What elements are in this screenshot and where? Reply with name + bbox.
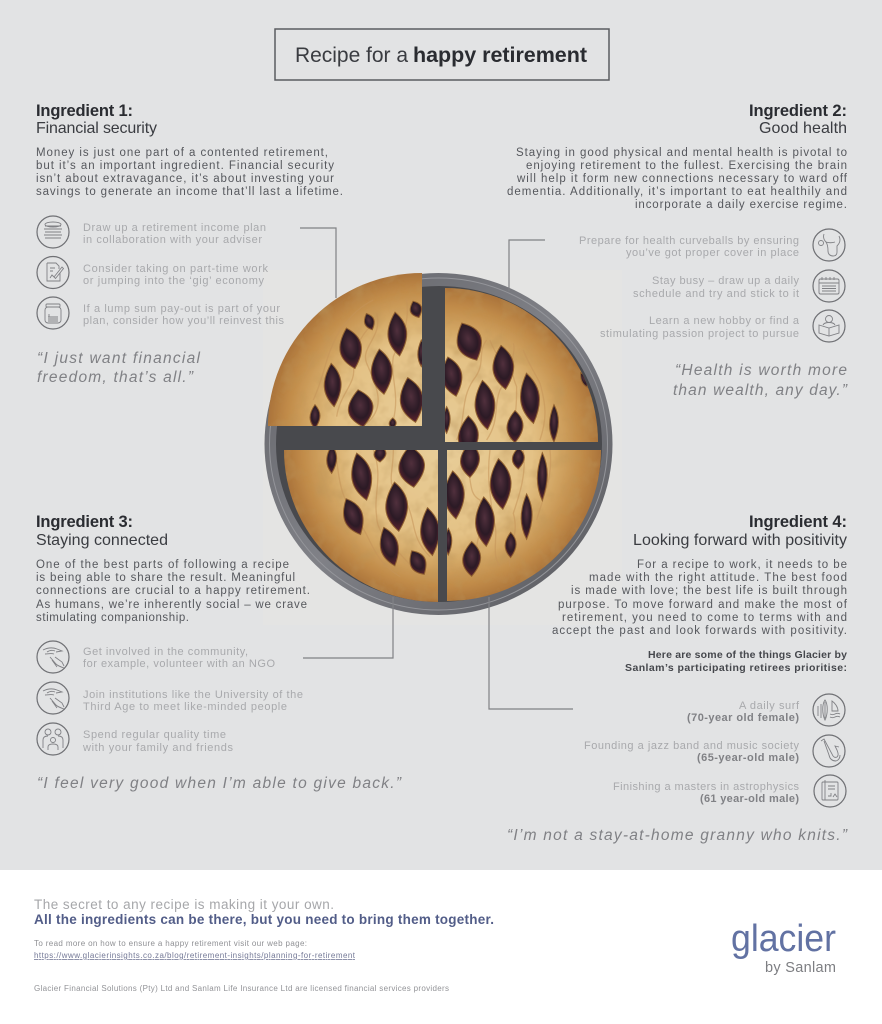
title box: happy retirement [413,43,587,67]
tip text: jazz band: Founding a jazz band and music society [584,740,800,752]
body text: ingredient 2: dementia. Additionally, it’s important to eat healthily and [507,186,847,198]
footer background [0,870,882,1024]
logo: glacier by Sanlam: by Sanlam [765,960,836,976]
read more link: To read more on how to ensure a happy retirement visit our web page: [34,939,307,948]
heading: ingredient 4: Ingredient 4: [749,513,847,531]
body text: ingredient 4 [552,559,848,637]
tip text: astrophysics [613,781,800,805]
tip text: daily schedule: schedule and try and stick to it [633,288,799,300]
body text: ingredient 3: As humans, we’re inherently social – we crave [36,599,307,611]
body text: ingredient 1: but it’s an important ingredient. Financial security [36,160,334,172]
tip text: part-time work: or jumping into the ‘gig’ economy [83,275,264,287]
heading: ingredient 1: Ingredient 1: [36,102,133,120]
body text: ingredient 2: Staying in good physical and mental health is pivotal to [516,147,847,159]
body text: ingredient 4: accept the past and look forwards with positivity. [552,625,847,637]
quote: ingredient 2: “Health is worth more [675,362,847,379]
tip text: family time: Spend regular quality time [83,729,226,741]
body text: ingredient 4: purpose. To move forward and make the most of [558,599,848,611]
tip text: income plan [83,222,266,246]
tip text: community [83,646,275,670]
read more link: https://www.glacierinsights.co.za/blog/retirement-insights/planning-for-retirement [34,951,356,960]
icon: person reading [813,310,845,342]
pie slice: bottom right [443,443,601,601]
icon: family [37,723,69,755]
quote: ingredient 2 [673,362,848,399]
tip text: part-time work: Consider taking on part-time work [83,263,268,275]
tip text: health cover: Prepare for health curveballs by ensuring [579,235,799,247]
tip text: lump sum: If a lump sum pay-out is part of your [83,303,280,315]
tip text: community: for example, volunteer with an NGO [83,658,275,670]
quote: ingredient 1 [37,350,201,386]
body text: ingredient 2: will help it form new connections necessary to ward off [516,173,848,185]
panel: ingredient 4 [507,513,848,844]
closing message [34,897,494,927]
subheading: retiree priorities [625,649,847,674]
body text: ingredient 1: isn’t about extravagance, it’s about investing your [36,173,334,185]
connector line: ingredient 2 [509,240,545,291]
icon: stethoscope [813,229,845,261]
heading: ingredient 2: Good health [759,120,847,137]
body text: ingredient 2: incorporate a daily exercise regime. [635,199,847,211]
tip text: part-time work [83,263,268,287]
tip text: daily schedule: Stay busy – draw up a daily [652,275,800,287]
heading: ingredient 4: Looking forward with positivity [633,532,847,549]
tip text: community: Get involved in the community, [83,646,248,658]
body text: ingredient 3 [36,559,310,624]
icon: helping hands [37,641,69,673]
quote: ingredient 3: “I feel very good when I’m able to give back.” [37,775,402,792]
quote: ingredient 2: than wealth, any day.” [673,382,848,399]
heading: ingredient 3 [36,513,168,549]
icon: thesis book [814,775,846,807]
panel: ingredient 3 [36,513,402,792]
tip text: lump sum [83,303,284,327]
body text: ingredient 3: One of the best parts of following a recipe [36,559,289,571]
pie illustration [264,273,612,615]
tip text: income plan: in collaboration with your adviser [83,234,262,246]
tip text: health cover: you’ve got proper cover in place [626,247,799,259]
read more link [34,939,356,960]
title box [275,29,609,80]
tip text: university [83,689,303,713]
subheading: retiree priorities: Here are some of the things Glacier by [648,649,847,661]
icon: calendar [813,270,845,302]
connector line: ingredient 3 [303,597,393,658]
heading: ingredient 3: Staying connected [36,532,168,549]
tip text: astrophysics: (61 year-old male) [700,793,799,805]
icon: document and pen [37,256,69,288]
body text: ingredient 2 [507,147,848,211]
icon: savings jar [37,297,69,329]
body text: ingredient 3: stimulating companionship. [36,612,189,624]
logo: glacier by Sanlam: glacier [731,918,836,960]
tip text: jazz band [584,740,800,764]
body text: ingredient 3: connections are crucial to a happy retirement. [36,585,310,597]
heading: ingredient 4 [633,513,847,549]
tip text: family time [82,729,234,754]
quote: ingredient 1: freedom, that’s all.” [37,369,194,386]
body text: ingredient 2: enjoying retirement to the fullest. Exercising the brain [526,160,847,172]
connector line: ingredient 4 [489,597,573,709]
quote: ingredient 1: “I just want financial [37,350,201,367]
heading: ingredient 1 [36,102,157,137]
icon: saxophone [813,735,845,767]
heading: ingredient 3: Ingredient 3: [36,513,133,531]
quote: ingredient 4: “I’m not a stay-at-home granny who knits.” [507,827,848,844]
tip text: daily surf: A daily surf [739,700,800,712]
tip text: daily schedule [633,275,800,300]
subheading: retiree priorities: Sanlam’s participating retirees prioritise: [625,662,847,674]
pie slice: bottom left [284,445,442,602]
tip text: new hobby [600,315,800,340]
icon: helping hands [37,682,69,714]
tip text: family time: with your family and friends [82,742,234,754]
tip text: lump sum: plan, consider how you’ll reinvest this [83,315,284,327]
body text: ingredient 1: savings to generate an income that’ll last a lifetime. [36,186,343,198]
body text: ingredient 1 [36,147,343,198]
closing message: All the ingredients can be there, but you need to bring them together. [34,912,494,927]
heading: ingredient 1: Financial security [36,120,157,137]
body text: ingredient 4: is made with love; the best life is built through [571,585,847,597]
body text: ingredient 4: retirement, you need to come to terms with and [562,612,847,624]
body text: ingredient 4: made with the right attitude. The best food [589,572,847,584]
tip text: university: Join institutions like the University of the [83,689,303,701]
icon: coins [37,216,69,248]
body text: ingredient 3: is being able to share the result. Meaningful [36,572,295,584]
connector line: ingredient 1 [300,228,336,298]
body text: ingredient 4: For a recipe to work, it needs to be [637,559,847,571]
tip text: university: Third Age to meet like-minded people [83,701,287,713]
heading: ingredient 2 [749,102,847,137]
tip text: income plan: Draw up a retirement income plan [83,222,266,234]
title box: Recipe for a [295,44,408,67]
logo: glacier by Sanlam [731,918,836,976]
tip text: jazz band: (65-year-old male) [697,752,799,764]
closing message: The secret to any recipe is making it your own. [34,897,334,912]
legal note: Glacier Financial Solutions (Pty) Ltd and Sanlam Life Insurance Ltd are licensed financial services providers [34,984,449,993]
footer [34,897,836,993]
tip text: astrophysics: Finishing a masters in astrophysics [613,781,800,793]
tip text: health cover [579,235,799,259]
icon: surfboard and sailboat [813,694,845,726]
pale square behind pie [263,270,622,625]
panel: ingredient 2 [507,102,848,399]
pie tin [264,273,612,615]
pie slice: top left [268,273,427,429]
tip text: daily surf: (70-year old female) [687,712,799,724]
body text: ingredient 1: Money is just one part of a contented retirement, [36,147,328,159]
panel: ingredient 1 [36,102,343,386]
tip text: new hobby: stimulating passion project to pursue [600,328,799,340]
pie slice: top right [445,288,598,442]
tip text: daily surf [687,700,800,724]
heading: ingredient 2: Ingredient 2: [749,102,847,120]
tip text: new hobby: Learn a new hobby or find a [649,315,800,327]
